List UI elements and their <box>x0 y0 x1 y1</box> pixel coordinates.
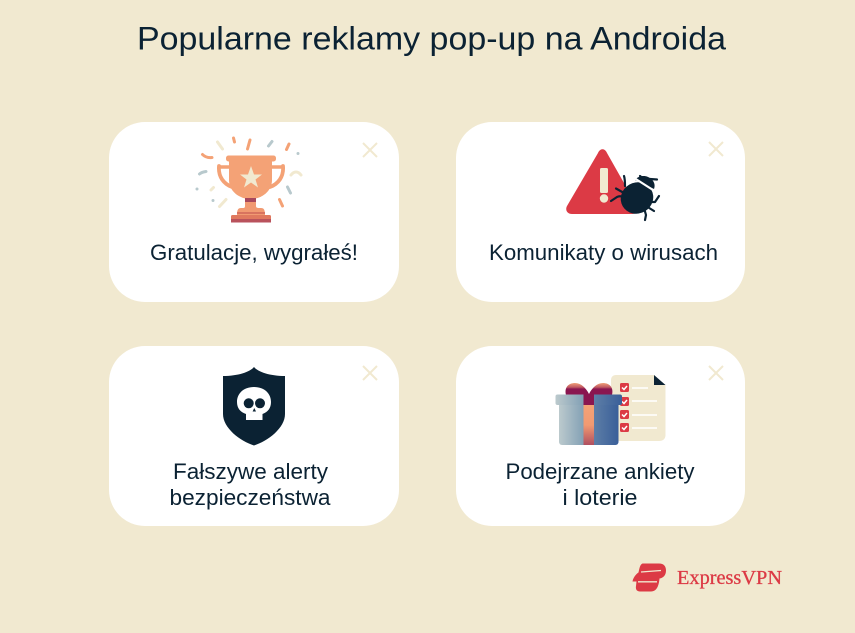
icon: warning triangle with bug <box>566 149 659 220</box>
panel: suspicious surveys and lotteries <box>456 346 745 526</box>
icon: shield with skull <box>223 367 285 446</box>
logo: ExpressVPN <box>632 564 782 592</box>
icon: close x <box>709 366 723 380</box>
panel: suspicious surveys and lotteries: i loterie <box>562 485 638 510</box>
logo wordmark: ExpressVPN <box>677 568 782 589</box>
label: congratulations: Gratulacje, wygrałeś! <box>150 240 358 265</box>
icon: checklist document <box>611 375 666 441</box>
label: virus warnings: Komunikaty o wirusach <box>489 240 718 265</box>
icon: close x <box>363 366 377 380</box>
panel: fake security alerts: bezpieczeństwa <box>170 485 331 510</box>
panel: virus warnings <box>456 122 745 302</box>
icon: close x <box>709 142 723 156</box>
icon: close x <box>363 143 377 157</box>
icon: gift box <box>556 383 622 445</box>
panel: fake security alerts <box>109 346 399 526</box>
title: Popularne reklamy pop-up na Androida <box>137 20 726 56</box>
panel: congratulations <box>109 122 399 302</box>
label: fake security alerts: Fałszywe alerty <box>173 459 328 484</box>
icon: trophy with confetti <box>196 138 301 222</box>
label: suspicious surveys and lotteries: Podejrzane ankiety <box>506 459 694 484</box>
icon: logo mark <box>632 564 666 592</box>
